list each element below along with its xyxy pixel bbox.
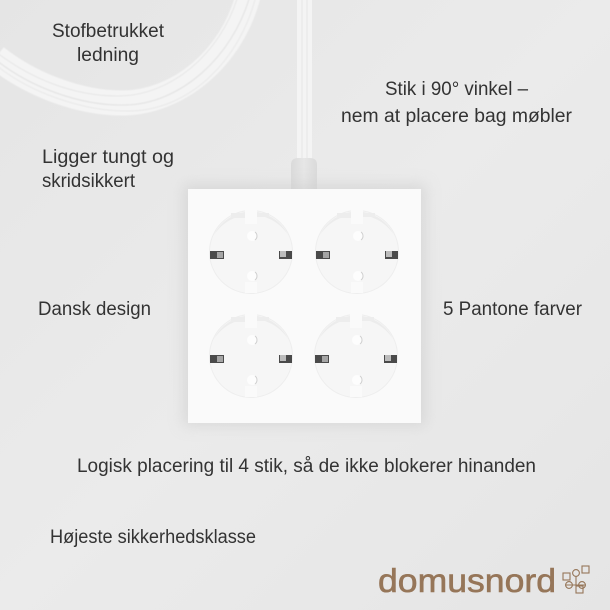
socket top left xyxy=(210,210,292,294)
white power strip with four sockets xyxy=(188,189,421,423)
label: safety class: Højeste sikkerhedsklasse xyxy=(50,527,256,548)
label: pantone colours: 5 Pantone farver xyxy=(443,299,583,320)
label: 90 degree plug xyxy=(341,79,573,127)
brand wordmark: domusnord xyxy=(378,562,556,599)
label: 90 degree plug: Stik i 90° vinkel – xyxy=(385,79,528,100)
vertical fabric cable xyxy=(297,0,312,159)
icon: brand logo xyxy=(563,566,589,593)
socket bottom right xyxy=(314,314,398,398)
label: fabric cable: ledning xyxy=(77,45,139,66)
coiled fabric cable xyxy=(0,0,256,111)
cable strain relief xyxy=(291,158,317,190)
label: 90 degree plug: nem at placere bag møbler xyxy=(341,106,573,127)
label: heavy and non-slip: Ligger tungt og xyxy=(42,147,174,168)
socket top right xyxy=(316,210,398,294)
socket bottom left xyxy=(210,314,292,398)
label: fabric cable xyxy=(52,21,165,66)
label: heavy and non-slip xyxy=(42,147,174,192)
label: danish design: Dansk design xyxy=(38,299,151,320)
label: heavy and non-slip: skridsikkert xyxy=(42,171,136,192)
panel shadow xyxy=(183,184,426,426)
label: fabric cable: Stofbetrukket xyxy=(52,21,165,42)
label: logical placement: Logisk placering til 4 stik, så de ikke blokerer hinanden xyxy=(77,456,536,477)
